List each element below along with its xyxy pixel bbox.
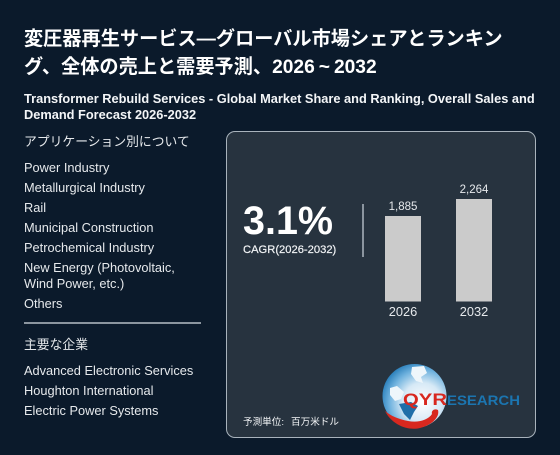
title <box>24 28 503 78</box>
list: applications <box>24 160 175 311</box>
list: applications: Others <box>24 296 62 311</box>
title: ~ <box>319 56 330 78</box>
icon: QYR Research logo <box>382 364 520 429</box>
heading: key companies: 主要な企業 <box>24 337 88 352</box>
bar: 2026 <box>385 201 421 319</box>
title: グ、全体の売上と需要予測、2026 2032 <box>24 56 377 78</box>
list: applications: Metallurgical Industry <box>24 180 145 195</box>
list: applications: Municipal Construction <box>24 220 153 235</box>
bar: 2032: 2,264 <box>460 184 489 196</box>
bar chart <box>385 184 492 319</box>
bar: 2032 <box>456 184 492 319</box>
icon: QYR Research logo: ESEARCH <box>447 392 520 408</box>
list: companies: Houghton International <box>24 383 154 398</box>
icon: QYR Research logo: QYR <box>403 390 447 409</box>
subtitle: Demand Forecast 2026-2032 <box>24 107 196 122</box>
forecast unit: 予測単位: 百万米ドル <box>243 416 339 428</box>
bar: 2026: 2026 <box>389 304 417 319</box>
list: companies: Advanced Electronic Services <box>24 363 193 378</box>
list: companies: Electric Power Systems <box>24 403 158 418</box>
subtitle: Transformer Rebuild Services - Global Market Share and Ranking, Overall Sales and <box>24 91 535 106</box>
title: 変圧器再生サービス—グローバル市場シェアとランキン <box>24 29 503 50</box>
CAGR value: 3.1% <box>243 199 333 243</box>
list: applications: Petrochemical Industry <box>24 240 154 255</box>
list: applications: New Energy (Photovoltaic, <box>24 260 175 275</box>
subtitle <box>24 91 535 122</box>
bar: 2032: 2032 <box>460 304 488 319</box>
heading: applications: アプリケーション別について <box>24 134 190 149</box>
list: companies <box>24 363 193 418</box>
list: applications: Wind Power, etc.) <box>24 276 124 291</box>
list: applications: Rail <box>24 200 46 215</box>
list: applications: Power Industry <box>24 160 109 175</box>
panel: forecast <box>226 131 536 438</box>
bar: 2026: 1,885 <box>389 201 417 213</box>
CAGR label: CAGR(2026-2032) <box>243 244 336 256</box>
